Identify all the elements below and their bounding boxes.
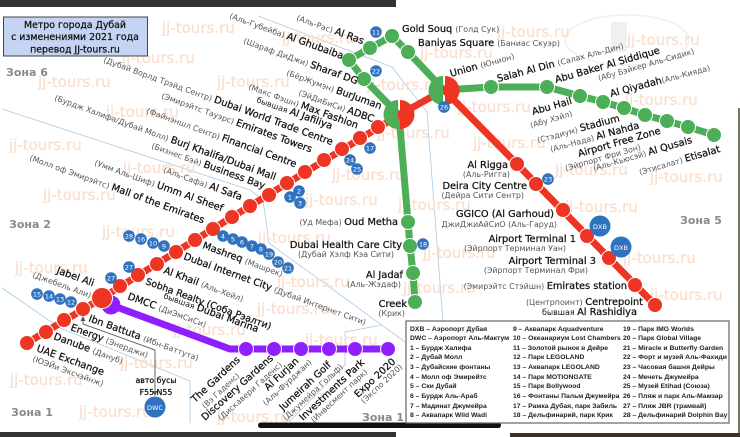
watermarks: jj-tours.ru	[397, 196, 471, 214]
north-east station labels: (Аль-Кьюсэй) Al Qusais	[592, 135, 694, 174]
legend: 4 – Молл оф Эмирейтс	[410, 373, 487, 381]
north-west station labels: (БёрЖумэн) BurJuman	[285, 67, 383, 112]
south-east horizontal station labels: (Эйрпорт Терминал Уан)	[464, 244, 566, 253]
zone labels	[6, 66, 722, 424]
interchange: Jabel Ali	[92, 288, 120, 314]
bus connection arrow	[80, 316, 158, 396]
numbered points of interest: 10	[149, 240, 157, 248]
north-east station labels: (Абу Бэйкер Аль-Сидик)	[597, 47, 695, 83]
watermarks: jj-tours.ru	[422, 244, 496, 262]
purple line labels: (Вэ Гаденс)	[200, 371, 241, 410]
purple line labels: Discovery Gardens	[200, 353, 276, 423]
north-east station labels: Airport Free Zone	[577, 126, 662, 160]
numbered points of interest: 23	[544, 176, 552, 184]
interchange: Union	[428, 76, 460, 105]
legend: 21 – Miracle и Butterfly Garden	[623, 345, 723, 352]
purple line labels: (Джумейра Гольф)	[281, 362, 345, 422]
watermarks: jj-tours.ru	[172, 321, 246, 339]
numbered points of interest: 28	[125, 232, 133, 240]
zone labels: Зона 2	[9, 218, 51, 231]
watermarks: jj-tours.ru	[366, 76, 440, 94]
numbered points of interest: 13	[56, 296, 64, 304]
legend: 12 – Парк LEGOLAND	[513, 354, 584, 361]
numbered points of interest: 15	[33, 290, 41, 298]
south-east horizontal station labels: (Эйрпорт Терминал Фри)	[484, 266, 588, 275]
north-west station labels: бывшая Al Jafiliya	[255, 94, 334, 132]
watermarks: jj-tours.ru	[626, 31, 700, 49]
south green branch labels	[290, 217, 407, 318]
green line	[342, 28, 722, 310]
south-east horizontal station labels: бывшая Al Rashidiya	[542, 307, 637, 318]
north-east station labels: Gold Souq (Голд Сук)	[402, 24, 499, 35]
purple line labels: (Инвесмент парк)	[309, 367, 369, 424]
watermarks: jj-tours.ru	[101, 223, 175, 241]
legend: 22 – Форт и музей Аль-Фахиди	[623, 353, 727, 361]
south-east horizontal station labels: GGICO (Al Garhoud)	[456, 209, 554, 220]
title box: перевод JJ-tours.ru	[30, 44, 120, 56]
watermarks: jj-tours.ru	[119, 354, 193, 372]
legend: 26 – Пляж и парк Аль-Мамзар	[623, 393, 723, 400]
numbered points of interest: 1	[288, 194, 292, 202]
bus label	[135, 376, 177, 397]
numbered points of interest: 17	[366, 144, 374, 152]
airport icons: DXB	[593, 223, 607, 231]
legend: 23 – Часовая башня Дейры	[623, 363, 715, 371]
north-east station labels: Abu Hail	[531, 96, 573, 118]
south-east station labels	[31, 240, 368, 388]
north-east station labels: (Этисалат) Etisalat	[638, 144, 722, 178]
watermarks: jj-tours.ru	[419, 44, 493, 62]
north-west station labels	[28, 10, 383, 226]
numbered points of interest: 6	[240, 238, 244, 246]
purple line labels	[189, 353, 404, 424]
watermarks: jj-tours.ru	[216, 73, 290, 91]
legend: 24 – Мечеть Джумейра	[623, 373, 699, 381]
legend: 25 – Музей Etihad (Союза)	[623, 382, 710, 390]
legend: 13 – Аквапарк LEGOLAND	[513, 364, 600, 371]
south-east horizontal station labels: (Аль-Ригга)	[463, 170, 510, 179]
watermarks: jj-tours.ru	[122, 159, 196, 177]
watermarks: jj-tours.ru	[276, 273, 350, 291]
north-east station labels: (Абу Хэйл)	[529, 109, 573, 130]
watermarks: jj-tours.ru	[257, 229, 331, 247]
watermark: top tours logo	[565, 15, 689, 65]
watermarks: jj-tours.ru	[622, 249, 696, 267]
south green branch labels: (Крик)	[378, 309, 405, 318]
south-east station labels: Danube (Дануб)	[52, 331, 125, 367]
watermarks: jj-tours.ru	[554, 161, 628, 179]
south-east station labels: Al Khail (Аль-Хейл)	[162, 265, 245, 305]
watermarks: jj-tours.ru	[216, 408, 290, 426]
watermarks: jj-tours.ru	[281, 29, 355, 47]
watermarks: jj-tours.ru	[331, 166, 405, 184]
watermarks: jj-tours.ru	[304, 331, 378, 349]
south-east horizontal station labels: (Эмирэйтс Стэйшн) Emirates station	[464, 281, 627, 292]
numbered points of interest: 21	[284, 264, 292, 272]
zone labels: Зона 1	[362, 411, 404, 424]
watermarks: jj-tours.ru	[496, 23, 570, 41]
north-west station labels: (Аль-Рас) Al Ras	[295, 12, 365, 47]
legend	[406, 321, 729, 423]
watermarks: jj-tours.ru	[649, 168, 723, 186]
title box: Метро города Дубай	[24, 20, 126, 31]
numbered points of interest: 26	[440, 104, 448, 112]
purple line	[111, 305, 396, 356]
south green branch labels: (Дубай Хэлф Кэа Сити)	[298, 250, 394, 259]
legend: 9 – Аквапарк Aquadventure	[513, 326, 604, 333]
watermarks: jj-tours.ru	[649, 286, 723, 304]
purple line labels: Expo 2020	[353, 357, 398, 400]
watermarks: jj-tours.ru	[105, 103, 179, 121]
north-west station labels: (Умм Аль-Шиф) Umm Al Sheef	[93, 157, 225, 215]
legend: 2 – Дубай Молл	[410, 353, 462, 361]
north-west station labels: (Файнэншл Сентр) Financial Centre	[145, 105, 298, 170]
legend: 1 – Бурдж Халифа	[410, 345, 472, 352]
numbered points of interest: 16	[137, 236, 145, 244]
north-east station labels	[402, 24, 722, 178]
south-east station labels: Energy (Энерджи)	[69, 322, 150, 361]
south-east station labels: Jabel Ali	[54, 265, 96, 289]
purple line labels: (Аль-Фурджан)	[261, 358, 314, 407]
numbered points of interest: 4	[221, 232, 225, 240]
numbered points of interest: 8	[259, 246, 263, 254]
north-east station labels: (Аль-Нада) Al Nahda	[549, 120, 641, 155]
south green branch labels: Creek	[379, 299, 407, 310]
north-west station labels: (Бурдж Халифа/Дубай Молл) Burj Khalifa/Dubai Mall	[53, 92, 277, 183]
watermarks: jj-tours.ru	[564, 198, 638, 216]
legend: DXB – Аэропорт Дубая	[410, 325, 487, 333]
numbered points of interest: 12	[67, 298, 75, 306]
numbered points of interest: 22	[372, 68, 380, 76]
south-east horizontal station labels: (Центрпоинт) Centrepoint	[526, 297, 643, 308]
south-east station labels: Ibn Battuta (Ибн-Баттута)	[87, 313, 200, 364]
numbered points of interest: 25	[353, 166, 361, 174]
south-east horizontal station labels: ДжиДжиАйСиО (Аль-Гаруд)	[441, 220, 557, 229]
red line	[20, 90, 662, 350]
legend: 19 – Парк IMG Worlds	[623, 326, 694, 333]
legend: 15 – Парк Bollywood	[513, 383, 581, 390]
north-west station labels: (ЭйДиБиСи) ADBC	[297, 87, 376, 125]
north-west station labels: (Молл оф Эмирэйтс) Mall of the Emirates	[28, 152, 206, 226]
bus label: F55 N55	[140, 388, 172, 397]
legend: 14 – Парк MOTIONGATE	[513, 374, 592, 381]
numbered points of interest: 14	[45, 292, 53, 300]
purple line labels: Investments Park	[298, 357, 367, 423]
legend: 28 – Дельфинарий Dolphin Bay	[623, 411, 728, 419]
watermarks: jj-tours.ru	[8, 136, 82, 154]
south-east station labels: Sobha Realty (Соба Рэалти)	[144, 276, 273, 332]
numbered points of interest	[31, 26, 554, 308]
south-east station labels: (ЮЭЙи Эксчэйнж)	[31, 353, 105, 388]
numbered points of interest: 18	[419, 240, 427, 248]
watermarks: jj-tours.ru	[624, 91, 698, 109]
numbered points of interest: 2	[297, 188, 301, 196]
zone labels: Зона 6	[6, 66, 48, 79]
north-west station labels: (Бизнес Бэй) Business Bay	[150, 140, 267, 192]
airport icons	[144, 216, 632, 418]
legend: 3 – Дубайские фонтаны	[410, 363, 491, 371]
north-east station labels: Baniyas Square (Баниас Скуэр)	[418, 38, 560, 49]
south-east horizontal station labels: Deira City Centre	[442, 181, 527, 192]
south-east station labels: Mashreq (Машрек)	[201, 240, 284, 280]
purple line labels: Al Furjan	[263, 356, 301, 393]
watermarks: jj-tours.ru	[161, 19, 235, 37]
south-east horizontal station labels: Airport Terminal 3	[509, 256, 596, 267]
legend: 17 – Рамка Дубая, парк Забиль	[513, 402, 617, 410]
south-east horizontal station labels: Airport Terminal 1	[489, 234, 576, 245]
numbered points of interest: 9	[162, 242, 166, 250]
numbered points of interest: 20	[274, 258, 282, 266]
airport icons: DXB	[614, 244, 628, 252]
south-east horizontal station labels: Al Rigga	[467, 160, 508, 171]
zone labels: Зона 1	[11, 406, 53, 419]
airport icons: DWC	[147, 404, 163, 412]
north-west station labels: (Аль-Губейба) Al Ghubaiba	[228, 10, 345, 62]
purple line labels: (Экспо 2020)	[359, 362, 404, 405]
legend: 16 – Фонтаны Пальм Джумейра	[513, 392, 620, 400]
south-east station labels: бывшая Dubai Marina	[162, 290, 260, 335]
bus label: авто бусы	[135, 376, 177, 385]
legend: 10 – Океанариум Lost Chambers	[513, 335, 621, 342]
purple line labels: (Дискавери Гаденс)	[216, 360, 284, 422]
numbered points of interest: 3	[298, 200, 302, 208]
watermarks: jj-tours.ru	[42, 186, 116, 204]
title box	[4, 17, 148, 56]
legend: 6 – Бурдж Аль-Араб	[410, 392, 478, 400]
south-east horizontal station labels	[441, 160, 643, 318]
watermarks: jj-tours.ru	[402, 279, 476, 297]
numbered points of interest: 27	[107, 274, 115, 282]
legend: 27 – Пляж JBR (трамвай)	[623, 402, 706, 410]
north-east station labels: Salah Al Din (Салах Аль-Дин)	[496, 41, 625, 85]
watermarks: jj-tours.ru	[376, 124, 450, 142]
watermarks: jj-tours.ru	[121, 49, 195, 67]
south green branch labels: Al Jadaf	[366, 270, 404, 281]
south-east station labels: UAE Exchange	[35, 343, 105, 378]
watermarks: jj-tours.ru	[14, 259, 88, 277]
south green branch labels: (Аль-Жэдаф)	[347, 280, 401, 289]
south-east station labels: DMCC (ДиЭмСиСи)	[126, 291, 208, 330]
south green branch labels: Dubai Health Care City	[290, 240, 402, 251]
legend: 18 – Дельфинарий, парк Крик	[513, 411, 613, 419]
purple line labels: Jumeirah Golf	[277, 359, 334, 414]
legend: 20 – Парк Global Village	[623, 335, 701, 342]
north-west station labels: (Шараф ДиДжи) Sharaf DG	[242, 35, 359, 87]
legend: 5 – Ски Дубай	[410, 382, 457, 390]
north-east station labels: Abu Baker Al Siddique	[554, 45, 661, 86]
north-east station labels: (Эйрпорт Фри Зон)	[564, 143, 642, 173]
south-east station labels: Dubai Internet City (Дубай Интернет Сити)	[182, 251, 368, 328]
watermarks: jj-tours.ru	[304, 191, 378, 209]
south green branch labels: (Уд Мефа) Oud Metha	[300, 217, 398, 228]
numbered points of interest: 19	[265, 250, 273, 258]
legend: 11 – Золотой рынок в Дейре	[513, 344, 608, 352]
purple line labels: The Gardens	[189, 355, 243, 406]
watermarks: jj-tours.ru	[256, 300, 330, 318]
interchange: BurJuman	[384, 100, 414, 129]
north-west station labels: (Аль-Сафа) Al Safa	[162, 164, 243, 203]
north-east station labels: Al Qiyadah(Аль-Кияда)	[609, 63, 711, 100]
title box: с изменениями 2021 года	[11, 32, 139, 43]
legend: DWC – Аэропорт Аль-Мактум	[410, 335, 509, 342]
legend: 7 – Мадинат Джумейра	[410, 402, 487, 410]
south-east station labels: (Джебель Али)	[31, 270, 92, 300]
numbered points of interest: 7	[250, 242, 254, 250]
watermarks: jj-tours.ru	[9, 371, 83, 389]
numbered points of interest: 5	[231, 236, 235, 244]
numbered points of interest: 24	[346, 156, 354, 164]
north-east station labels: Union (Юнион)	[449, 51, 516, 80]
watermarks: jj-tours.ru	[37, 73, 111, 91]
numbered points of interest: 27	[125, 264, 133, 272]
north-west station labels: (Макс Фэшн) Max Fashion	[247, 81, 360, 131]
legend: 8 – Аквапарк Wild Wadi	[410, 412, 487, 419]
watermarks: jj-tours.ru	[78, 403, 152, 421]
watermarks: jj-tours.ru	[457, 98, 531, 116]
north-east station labels: (Стэдиум) Stadium	[536, 113, 621, 146]
numbered points of interest: 11	[372, 28, 380, 36]
north-west station labels: (Эмирэйтс Тауэрс) Emirates Towers	[160, 90, 313, 155]
south-east horizontal station labels: (Дейра Сити Сентр)	[441, 191, 524, 200]
zone labels: Зона 5	[680, 214, 722, 227]
watermarks: jj-tours.ru	[472, 134, 546, 152]
north-west station labels: (Дубай Ворлд Трэйд Сентр) Dubai World Trade Centre	[102, 54, 334, 148]
